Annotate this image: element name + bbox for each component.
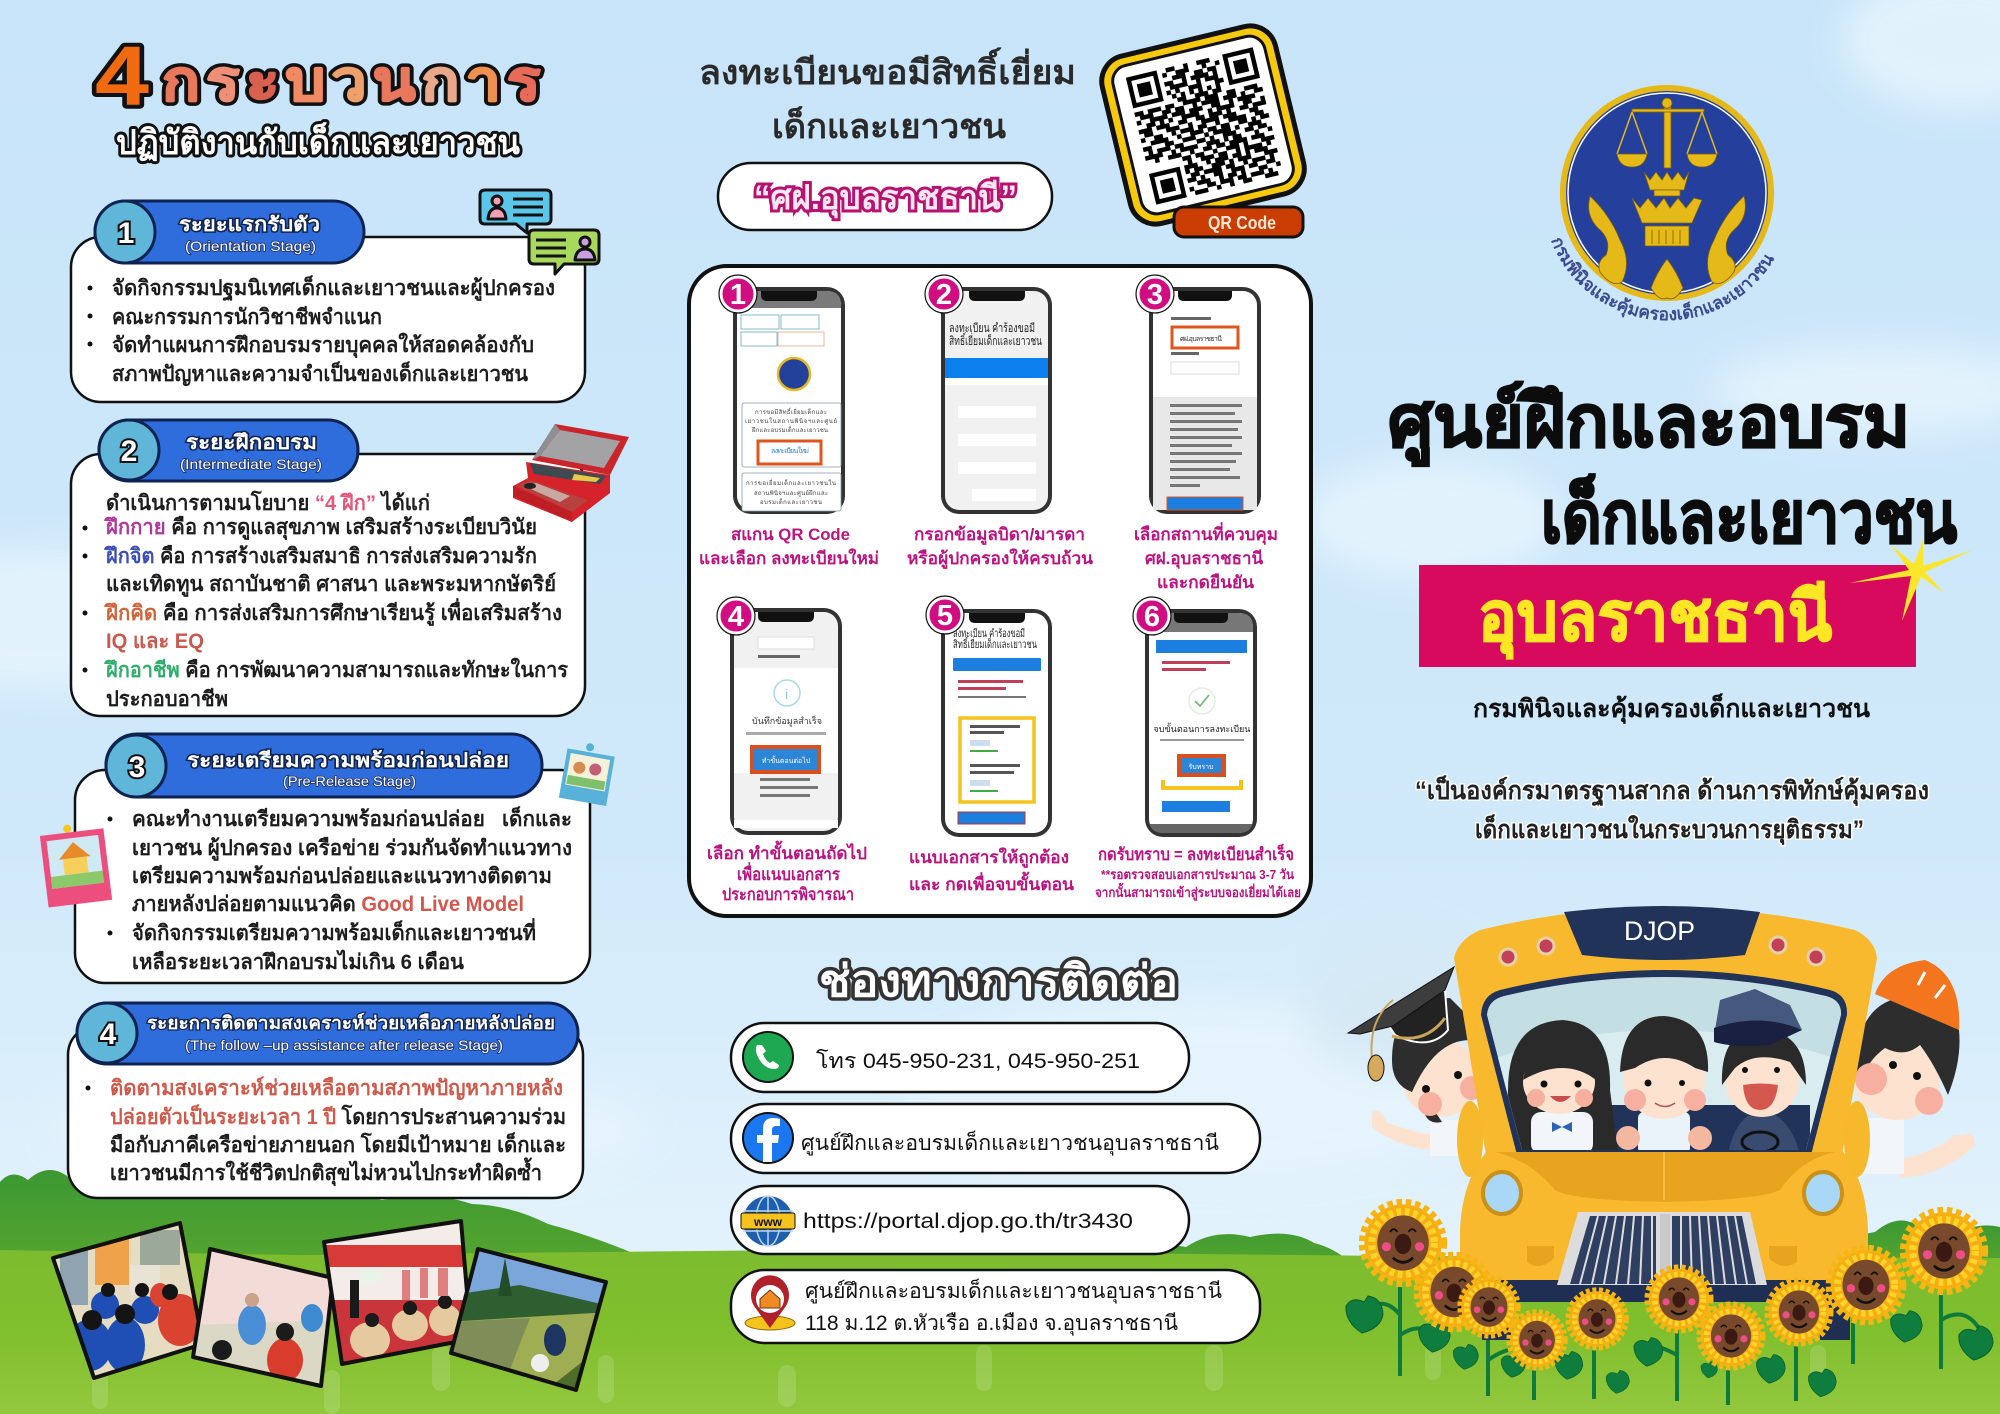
- QR Code label: [1174, 207, 1303, 237]
- step number badges: 2: [936, 279, 952, 311]
- contact: facebook: ศูนย์ฝึกและอบรมเด็กและเยาวชนอุบลราชธานี: [801, 1129, 1219, 1156]
- stage 4 text: ปล่อยตัวเป็นระยะเวลา 1 ปี โดยการประสานความร่วม: [110, 1103, 566, 1129]
- stage 1 header pill: (Orientation Stage): [185, 238, 316, 254]
- leaves: [1346, 1296, 1993, 1397]
- step 2 phone: สิทธิ์เยี่ยมเด็กและเยาวชน: [949, 332, 1042, 348]
- step 3 phone: ศฝ.อุบลราชธานี: [1180, 335, 1222, 343]
- title: 4 กระบวนการ: กระบวนการ: [162, 49, 541, 112]
- step 6 phone: รับทราบ: [1189, 763, 1213, 771]
- bus hood and details: [1457, 1101, 1870, 1285]
- step 4 phone: i: [785, 686, 788, 702]
- stage 4 text: ติดตามสงเคราะห์ช่วยเหลือตามสภาพปัญหาภายหลัง: [110, 1076, 563, 1101]
- panel: stage 1: [71, 190, 599, 402]
- step captions: เพื่อแนบเอกสาร: [737, 862, 841, 884]
- step 4 phone: ทำขั้นตอนต่อไป: [762, 754, 811, 765]
- contact: phone: [731, 1023, 1189, 1092]
- stage 2 text: ดำเนินการตามนโยบาย “4 ฝึก” ได้แก่: [106, 490, 430, 515]
- icon: family photo pink: [39, 820, 112, 908]
- step number badges: 1: [730, 279, 746, 311]
- stage 1 header pill: 1: [118, 217, 134, 250]
- stage 2 header pill: (Intermediate Stage): [180, 456, 322, 472]
- sunflowers: [1363, 1203, 1984, 1368]
- title: 4 กระบวนการ: 4: [95, 29, 149, 123]
- step 1 phone: [733, 287, 845, 514]
- step captions: หรือผู้ปกครองให้ครบถ้วน: [907, 548, 1093, 570]
- heading: contact channels: ช่องทางการติดต่อ: [819, 957, 1178, 1006]
- stage 3 text: ภายหลังปล่อยตามแนวคิด Good Live Model: [132, 893, 524, 916]
- photo: meditation room: [190, 1245, 340, 1392]
- heading: register for visit rights: เด็กและเยาวชน: [772, 105, 1006, 146]
- step 1 phone: สถานพินิจฯและศูนย์ฝึกและ: [754, 489, 828, 497]
- child: right with orange hard hat: [1854, 960, 1975, 1178]
- stage 2 header pill: [99, 420, 358, 481]
- step captions: สแกน QR Code: [731, 525, 850, 544]
- stage 1 bullets: คณะกรรมการนักวิชาชีพจำแนก: [112, 305, 382, 329]
- stage 4 text: มือกับภาคีเครือข่ายภายนอก โดยมีเป้าหมาย เด็กและ: [110, 1131, 566, 1157]
- title: 4 กระบวนการ: [95, 29, 541, 162]
- contact: phone: โทร 045-950-231, 045-950-251: [816, 1049, 1140, 1073]
- panel: stage 3: [39, 734, 616, 983]
- step 4 phone: บันทึกข้อมูลสำเร็จ: [752, 714, 822, 727]
- step captions: [699, 522, 1301, 904]
- step captions: และเลือก ลงทะเบียนใหม่: [699, 548, 879, 568]
- stage 3 text: คณะทำงานเตรียมความพร้อมก่อนปล่อย เด็กและ: [132, 805, 572, 831]
- stage 3 header pill: 3: [129, 751, 145, 784]
- stage 3 text: เหลือระยะเวลาฝึกอบรมไม่เกิน 6 เดือน: [132, 949, 465, 974]
- background: hills and grass: [0, 1170, 2000, 1414]
- contact: address: [731, 1270, 1260, 1343]
- title: 4 กระบวนการ: กระบวนการ: [162, 49, 541, 112]
- icon: chat profile bubbles: [480, 190, 599, 274]
- child: driver with cap: [1714, 989, 1806, 1155]
- icon: location pin: [745, 1275, 795, 1330]
- step captions: แนบเอกสารให้ถูกต้อง: [909, 847, 1069, 869]
- emblem curved text: กรมพินิจและคุ้มครองเด็กและเยาวชน: [1551, 238, 1774, 321]
- sunflower stems and leaves: [1375, 1285, 1980, 1405]
- banner: Ubon Ratchathani: [1419, 565, 1916, 667]
- stage 1 bullets: จัดทำแผนการฝึกอบรมรายบุคคลให้สอดคล้องกับ: [112, 332, 534, 359]
- subtitle: department: กรมพินิจและคุ้มครองเด็กและเยาวชน: [1473, 693, 1870, 725]
- heading: register for visit rights: ลงทะเบียนขอมีสิทธิ์เยี่ยม: [699, 47, 1076, 92]
- step 4 phone: [730, 608, 842, 835]
- photo: rice field: [445, 1245, 610, 1395]
- stage 4 header pill: (The follow –up assistance after release Stage): [185, 1037, 503, 1053]
- stage 1 header pill: [95, 201, 364, 263]
- stage 3 text: เยาวชน ผู้ปกครอง เครือข่าย ร่วมกันจัดทำแนวทาง: [132, 836, 572, 862]
- step 5 phone: สิทธิ์เยี่ยมเด็กและเยาวชน: [953, 636, 1037, 651]
- step 2 phone: [941, 287, 1052, 514]
- pill: ศฝ.อุบลราชธานี: “ศฝ.อุบลราชธานี”: [754, 179, 1017, 219]
- step number badges: 4: [728, 601, 744, 633]
- step 1 phone: อบรมเด็กและเยาวชน: [760, 497, 822, 506]
- step captions: และกดยืนยัน: [1157, 572, 1254, 592]
- stage 2 header pill: 2: [121, 435, 137, 468]
- stage 2 text: ฝึกจิต คือ การสร้างเสริมสมาธิ การส่งเสริมความรัก: [103, 544, 537, 568]
- step captions: กรอกข้อมูลบิดา/มารดา: [914, 525, 1085, 546]
- stage 2 header pill: ระยะฝึกอบรม: [186, 432, 317, 454]
- icon: www globe: www: [753, 1215, 783, 1229]
- panel: registration steps: [689, 266, 1311, 916]
- QR code card: [1096, 21, 1310, 237]
- title: training centre: [1388, 381, 1957, 558]
- stage 3 header pill: ระยะเตรียมความพร้อมก่อนปล่อย: [187, 749, 509, 772]
- photo: classroom: [50, 1221, 198, 1380]
- stage 3 text: จัดกิจกรรมเตรียมความพร้อมเด็กและเยาวชนที่: [132, 917, 536, 945]
- step 1 phone: เยาวชนในสถานพินิจฯและศูนย์: [745, 417, 837, 425]
- child: girl: [1505, 1020, 1618, 1154]
- step captions: เลือกสถานที่ควบคุม: [1134, 522, 1278, 545]
- stage 4 header pill: [77, 1003, 578, 1064]
- banner: Ubon Ratchathani: อุบลราชธานี: [1478, 579, 1832, 659]
- stage 2 text: ฝึกอาชีพ คือ การพัฒนาความสามารถและทักษะในการ: [103, 657, 569, 682]
- step 2 phone: ลงทะเบียน คำร้องขอมี: [949, 321, 1035, 335]
- stage 4 text: [86, 1076, 566, 1187]
- stage 2 text: ฝึกกาย คือ การดูแลสุขภาพ เสริมสร้างระเบียบวินัย: [103, 515, 537, 541]
- step captions: ศฝ.อุบลราชธานี: [1145, 548, 1263, 569]
- step number badges: 6: [1144, 601, 1160, 633]
- stage 2 text: ประกอบอาชีพ: [106, 687, 228, 711]
- icon: red toolbox: [513, 424, 629, 522]
- step 5 phone: [941, 609, 1052, 837]
- stage 2 text: [82, 490, 569, 711]
- title: training centre: ศูนย์ฝึกและอบรม: [1388, 381, 1910, 467]
- icon: family photo blue: [559, 740, 616, 806]
- contact: facebook: [731, 1104, 1260, 1173]
- step captions: และ กดเพื่อจบขั้นตอน: [909, 871, 1074, 894]
- illustration: school bus with children and sunflowers: [1346, 906, 1993, 1405]
- icon: facebook: [743, 1113, 793, 1163]
- stage 3 header pill: [106, 734, 542, 797]
- photo: stage event: [322, 1219, 468, 1366]
- step number badges: 5: [937, 600, 953, 632]
- step captions: **รอตรวจสอบเอกสารประมาณ 3-7 วัน: [1101, 867, 1294, 882]
- step 6 phone: [1145, 609, 1257, 837]
- step 3 phone: [1149, 287, 1261, 514]
- stage 2 text: IQ และ EQ: [106, 630, 204, 653]
- stage 2 text: ฝึกคิด คือ การส่งเสริมการศึกษาเรียนรู้ เพื่อเสริมสร้าง: [103, 597, 562, 627]
- step 1 phone: การขอเยี่ยมเด็กและเยาวชนใน: [746, 478, 836, 487]
- step captions: เลือก ทำขั้นตอนถัดไป: [707, 840, 867, 863]
- panel: stage 2: [71, 420, 629, 716]
- stage 3 text: [108, 805, 572, 974]
- stage 1 bullets: จัดกิจกรรมปฐมนิเทศเด็กและเยาวชนและผู้ปกครอง: [112, 274, 555, 302]
- quote: เด็กและเยาวชนในกระบวนการยุติธรรม”: [1475, 814, 1864, 846]
- step captions: ประกอบการพิจารณา: [722, 885, 854, 904]
- icon: phone: [743, 1032, 793, 1082]
- stage 1 bullets: สภาพปัญหาและความจำเป็นของเด็กและเยาวชน: [112, 360, 529, 387]
- stage 3 header pill: (Pre-Release Stage): [283, 773, 416, 789]
- title: 4 กระบวนการ: ปฏิบัติงานกับเด็กและเยาวชน: [116, 121, 520, 162]
- stage 1 header pill: ระยะแรกรับตัว: [179, 214, 320, 236]
- stage 4 header pill: ระยะการติดตามสงเคราะห์ช่วยเหลือภายหลังปล่อย: [147, 1012, 555, 1033]
- contact: website: https://portal.djop.go.th/tr3430: [803, 1210, 1133, 1233]
- QR Code label: QR Code: [1208, 213, 1276, 233]
- bus windshield and children inside: [1481, 970, 1848, 1152]
- step number badges: [717, 275, 1174, 635]
- step 5 phone: ลงทะเบียน คำร้องขอมี: [953, 627, 1025, 640]
- contact: address: ศูนย์ฝึกและอบรมเด็กและเยาวชนอุบลราชธานี: [805, 1277, 1222, 1304]
- stage 4 header pill: 4: [100, 1018, 117, 1051]
- step 6 phone: จบขั้นตอนการลงทะเบียน: [1154, 722, 1250, 734]
- bus body: DJOP: [1624, 916, 1695, 946]
- emblem: department seal: [1551, 85, 1774, 321]
- quote: “เป็นองค์กรมาตรฐานสากล ด้านการพิทักษ์คุ้มครอง: [1415, 775, 1929, 807]
- stage 4 text: เยาวชนมีการใช้ชีวิตปกติสุขไม่หวนไปกระทำผิดซ้ำ: [110, 1157, 542, 1187]
- pill: ศฝ.อุบลราชธานี: [718, 163, 1052, 230]
- step 1 phone: ฝึกและอบรมเด็กและเยาวชน: [751, 425, 828, 434]
- stage 3 text: เตรียมความพร้อมก่อนปล่อยและแนวทางติดตาม: [132, 864, 552, 888]
- step captions: จากนั้นสามารถเข้าสู่ระบบจองเยี่ยมได้เลย: [1095, 882, 1301, 901]
- step 1 phone: ลงทะเบียนใหม่: [771, 446, 809, 455]
- icon: sparkle: [1850, 540, 1973, 621]
- step number badges: 3: [1147, 279, 1163, 311]
- quote: [1415, 775, 1929, 846]
- stage 2 text: และเทิดทูน สถาบันชาติ ศาสนา และพระมหากษัตริย์: [106, 572, 556, 598]
- bus body: [1454, 906, 1877, 1340]
- child: boy thumbs up: [1616, 1016, 1712, 1154]
- panel: stage 4: [68, 1003, 583, 1198]
- step captions: กดรับทราบ = ลงทะเบียนสำเร็จ: [1098, 842, 1294, 864]
- contact: website: [731, 1186, 1189, 1254]
- contact: address: 118 ม.12 ต.หัวเรือ อ.เมือง จ.อุบลราชธานี: [805, 1312, 1178, 1336]
- icon: www globe: [741, 1196, 795, 1246]
- heading: register for visit rights: [699, 47, 1076, 146]
- child: left with graduation cap: [1348, 967, 1484, 1156]
- stage 1 bullets: [88, 274, 555, 387]
- step 1 phone: การขอมีสิทธิ์เยี่ยมเด็กและ: [755, 407, 827, 416]
